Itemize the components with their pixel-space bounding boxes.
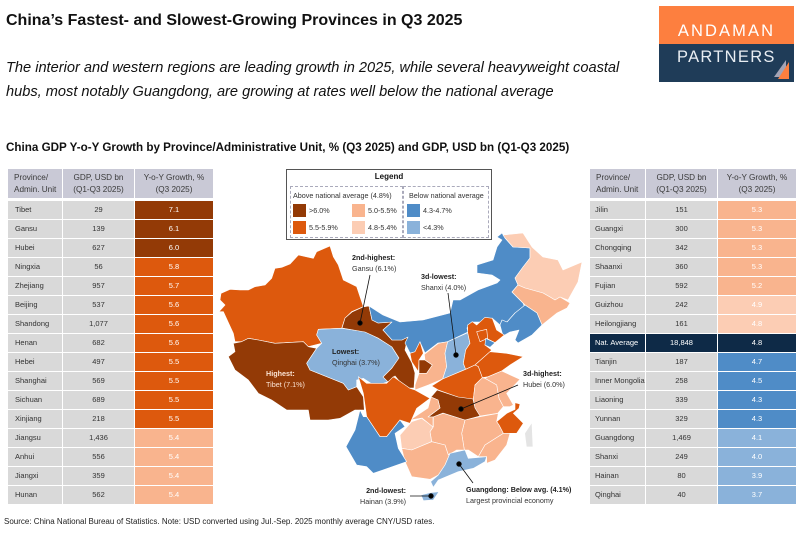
label: Qinghai: Lowest: [332,347,359,356]
map: Xinjiang [219,246,363,347]
left table: 5.6 [169,319,179,328]
left table: Ningxia [15,262,40,271]
left table: 218 [92,414,105,423]
label: Tibet [266,369,305,389]
label: Hainan: 2nd-lowest: [366,486,406,495]
right table [590,169,796,504]
source note: Source: China National Bureau of Statistics. Note: USD converted using Jul.-Sep. 2025 monthly average CNY/USD rates. [4,517,434,526]
left table: Sichuan [15,395,42,404]
map: Gansu east [419,360,432,373]
left table: Beijing [15,300,38,309]
left table: Anhui [15,452,34,461]
right table: 5.3 [752,243,762,252]
left table: Province/ [14,173,48,182]
right table: Tianjin [595,357,617,366]
right table: Qinghai [595,490,621,499]
right table: 4.3 [752,414,762,423]
right table: 5.3 [752,205,762,214]
left table: Shanghai [15,376,47,385]
map: Tianjin [485,338,495,347]
left table: 1,077 [89,319,108,328]
label: Gansu: Gansu (6.1%) [352,264,396,273]
label: Qinghai: Qinghai (3.7%) [332,358,380,367]
label: Hainan: Hainan (3.9%) [360,497,406,506]
right table: Jilin [595,205,608,214]
map: Fujian [478,433,510,463]
right table: 187 [675,357,688,366]
left table: (Q1-Q3 2025) [73,185,124,194]
logo: PARTNERS [677,48,776,66]
left table: 5.4 [169,452,179,461]
right table: 80 [677,471,686,480]
logo: ANDAMAN [678,22,775,40]
right table: 3.7 [752,490,762,499]
label: Hubei: Hubei (6.0%) [523,380,565,389]
right table: Hainan [595,471,619,480]
left table: 5.5 [169,395,179,404]
left table: Jiangsu [15,433,41,442]
legend: 5.5-5.9% [309,223,338,232]
left table: 957 [92,281,105,290]
left table: 359 [92,471,105,480]
left table: 56 [94,262,103,271]
label: Shanxi [421,272,466,292]
right table: 5.3 [752,262,762,271]
subtitle: The interior and western regions are leading growth in 2025, while several heavyweight coastal [6,60,619,76]
right table: Admin. Unit [596,185,638,194]
left table: 5.5 [169,376,179,385]
label: Hubei [523,369,565,389]
right table: Chongqing [595,243,631,252]
right table: 151 [675,205,688,214]
map: Gansu [342,306,415,388]
map: Beijing [477,329,488,342]
legend [286,169,492,240]
legend: 4.3-4.7% [423,206,452,215]
right table: Nat. Average [595,338,638,347]
right table: 18,848 [670,338,693,347]
label: Shanxi: 3d-lowest: [421,272,457,281]
leader lines [358,275,518,498]
left table: 5.7 [169,281,179,290]
map: Heilongjiang [503,233,582,300]
left table: GDP, USD bn [74,173,123,182]
left table: 682 [92,338,105,347]
right table: (Q3 2025) [739,185,775,194]
right table: 4.5 [752,376,762,385]
left table: 29 [94,205,103,214]
map: Liaoning [500,305,542,343]
right table: GDP, USD bn [657,173,706,182]
left table: Shandong [15,319,49,328]
map: Jilin [512,285,570,325]
map: Yunnan [346,410,407,473]
left table: 627 [92,243,105,252]
legend: Above national average (4.8%) [293,191,392,200]
legend: Below national average [409,191,484,200]
left table: 5.8 [169,262,179,271]
map: Jiangxi [462,413,503,457]
right table: 40 [677,490,686,499]
left table: Hunan [15,490,37,499]
legend: <4.3% [423,223,444,232]
map: Guizhou [400,418,433,450]
title: China’s Fastest- and Slowest-Growing Provinces in Q3 2025 [6,12,462,29]
right table: Guangxi [595,224,623,233]
left table: 5.5 [169,414,179,423]
left table: 1,436 [89,433,108,442]
label: Gansu [352,253,396,273]
right table: 4.1 [752,433,762,442]
label: Tibet: Highest: [266,369,295,378]
left table: 139 [92,224,105,233]
subtitle [6,60,620,100]
label: Hainan [360,486,406,506]
map: Tibet [228,338,364,420]
map: Shandong [475,352,523,378]
left table: Tibet [15,205,31,214]
right table: (Q1-Q3 2025) [656,185,707,194]
right table: Yunnan [595,414,620,423]
left table: 6.1 [169,224,179,233]
map: Chongqing [410,397,440,427]
left table: 5.5 [169,357,179,366]
left table: Xinjiang [15,414,42,423]
map: Taiwan [525,423,533,447]
left table: Gansu [15,224,37,233]
right table: Fujian [595,281,615,290]
left table: 5.4 [169,433,179,442]
left table: 6.0 [169,243,179,252]
left table: 5.6 [169,300,179,309]
right table: 242 [675,300,688,309]
right table: Y-o-Y Growth, % [727,173,787,182]
right table: 1,469 [672,433,691,442]
right table: 342 [675,243,688,252]
map: Guangdong [431,450,487,487]
map: Hainan [421,492,439,501]
label: Guangdong [466,485,572,505]
right table: 249 [675,452,688,461]
map: Shanxi [443,333,470,379]
map: Shaanxi [415,342,448,390]
map: Hubei [428,390,480,420]
label: Gansu: 2nd-highest: [352,253,395,262]
label: Tibet: Tibet (7.1%) [266,380,305,389]
left table: 5.4 [169,490,179,499]
label: Shanxi: Shanxi (4.0%) [421,283,466,292]
left table: Zhejiang [15,281,44,290]
right table: 5.2 [752,281,762,290]
right table: 329 [675,414,688,423]
right table: Guizhou [595,300,623,309]
left table: 537 [92,300,105,309]
label: Hubei: 3d-highest: [523,369,562,378]
right table: 4.0 [752,452,762,461]
right table: Heilongjiang [595,319,636,328]
left table: Y-o-Y Growth, % [144,173,204,182]
left table: 556 [92,452,105,461]
right table: 5.3 [752,224,762,233]
right table: Guangdong [595,433,634,442]
left table: Henan [15,338,37,347]
left table [8,169,213,504]
map: Qinghai [307,328,399,390]
right table: 161 [675,319,688,328]
left table: 689 [92,395,105,404]
logo [659,6,794,82]
map: Inner Mongolia [369,233,530,353]
left table: 562 [92,490,105,499]
left table: Hebei [15,357,35,366]
left table: Hubei [15,243,35,252]
map: Anhui [473,378,503,416]
legend: 4.8-5.4% [368,223,397,232]
label: Guangdong: Guangdong: Below avg. (4.1%) [466,485,571,494]
right table: Shaanxi [595,262,622,271]
label: Qinghai [332,347,380,367]
right table: 3.9 [752,471,762,480]
right table: Inner Mongolia [595,376,645,385]
legend: 5.0-5.5% [368,206,397,215]
left table: 497 [92,357,105,366]
map: Hebei [463,317,504,369]
left table: Jiangxi [15,471,38,480]
map: Zhejiang [497,403,523,433]
left table: 5.6 [169,338,179,347]
right table: Liaoning [595,395,623,404]
map: Jiangsu [485,371,520,407]
map: Ningxia [410,342,423,372]
left table: 5.4 [169,471,179,480]
right table: 4.8 [752,319,762,328]
right table: 4.9 [752,300,762,309]
right table: 4.8 [752,338,762,347]
map: Guangxi [402,442,450,479]
left table: (Q3 2025) [156,185,192,194]
subtitle: hubs, most notably Guangdong, are growing at rates well below the national average [6,84,554,100]
right table: 360 [675,262,688,271]
legend: Legend [375,172,403,181]
map: Hunan [430,413,465,455]
right table: 4.3 [752,395,762,404]
chart heading: China GDP Y-o-Y Growth by Province/Administrative Unit, % (Q3 2025) and GDP, USD bn (Q1-Q3 2025) [6,141,569,154]
label: Guangdong: Largest provincial economy [466,496,554,505]
map: Sichuan [358,377,430,437]
right table: 4.7 [752,357,762,366]
right table: Shanxi [595,452,618,461]
left table: 569 [92,376,105,385]
left table: Admin. Unit [14,185,56,194]
right table: 300 [675,224,688,233]
left table: 7.1 [169,205,179,214]
right table: Province/ [596,173,630,182]
legend: >6.0% [309,206,330,215]
right table: 258 [675,376,688,385]
right table: 339 [675,395,688,404]
map: Henan [432,365,482,399]
right table: 592 [675,281,688,290]
